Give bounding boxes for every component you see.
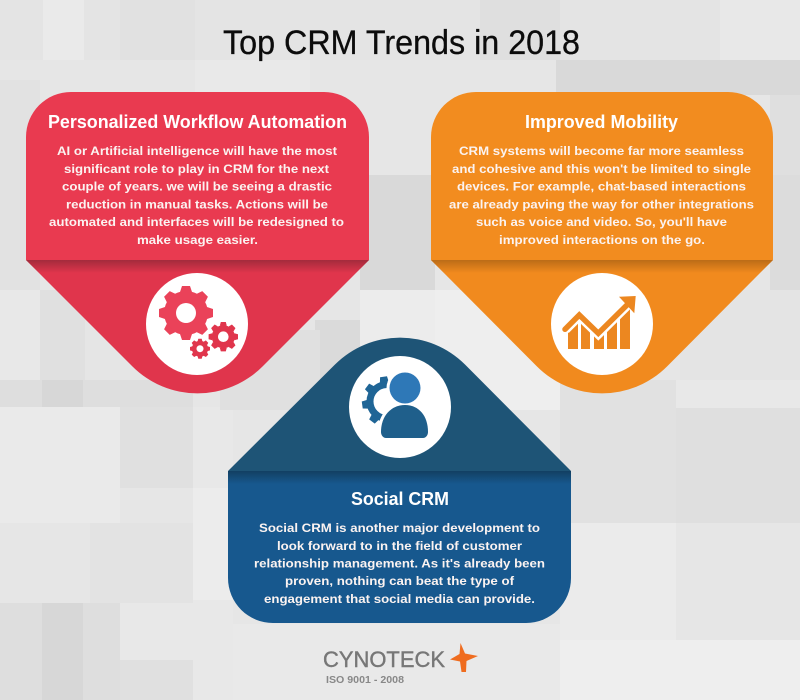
icon: person with gear bbox=[349, 356, 451, 458]
logo wordmark: CYNOTECK bbox=[323, 647, 445, 672]
panel shape: red card bbox=[26, 92, 369, 260]
body text: proven, nothing can beat the type of bbox=[285, 574, 515, 588]
shoulder shadow bbox=[228, 471, 571, 484]
body text: are already paving the way for other integrations bbox=[449, 198, 754, 212]
panel pointer: blue bbox=[228, 338, 571, 471]
panel shape: blue card bbox=[228, 471, 571, 623]
body text: such as voice and video. So, you'll have bbox=[476, 215, 727, 229]
body text: reduction in manual tasks. Actions will be bbox=[66, 198, 328, 212]
panel shape: orange card bbox=[431, 92, 773, 260]
body text: significant role to play in CRM for the next bbox=[64, 162, 329, 176]
body text: CRM systems will become far more seamless bbox=[459, 144, 744, 158]
body text bbox=[49, 144, 345, 247]
logo: cynoteck bbox=[323, 643, 478, 686]
body text: Social CRM is another major development to bbox=[259, 521, 541, 535]
panel pointer: red bbox=[26, 260, 369, 393]
heading: Personalized Workflow Automation bbox=[48, 112, 347, 132]
body text bbox=[254, 521, 545, 606]
body text: couple of years. we will be seeing a drastic bbox=[62, 180, 332, 194]
icon: orange star bbox=[450, 643, 478, 672]
body text: devices. For example, chat-based interactions bbox=[457, 180, 746, 194]
panel: social crm bbox=[228, 338, 571, 623]
panel pointer: orange bbox=[431, 260, 773, 393]
body text: AI or Artificial intelligence will have the most bbox=[57, 144, 337, 158]
body text bbox=[449, 144, 754, 247]
heading: Improved Mobility bbox=[525, 112, 678, 132]
panel: improved mobility bbox=[431, 92, 773, 393]
body text: and cohesive and this won't be limited to single bbox=[452, 162, 751, 176]
icon: gears bbox=[146, 273, 248, 375]
icon: growth chart bbox=[551, 273, 653, 375]
body text: automated and interfaces will be redesigned to bbox=[49, 215, 345, 229]
body text: improved interactions on the go. bbox=[499, 233, 705, 247]
logo certification: ISO 9001 - 2008 bbox=[326, 675, 404, 686]
body text: engagement that social media can provide. bbox=[264, 592, 535, 606]
body text: look forward to in the field of customer bbox=[277, 539, 522, 553]
title: Top CRM Trends in 2018 bbox=[223, 24, 580, 62]
heading: Social CRM bbox=[351, 489, 449, 509]
panel: personalized workflow automation bbox=[26, 92, 369, 393]
body text: make usage easier. bbox=[137, 233, 258, 247]
body text: relationship management. As it's already been bbox=[254, 556, 545, 570]
